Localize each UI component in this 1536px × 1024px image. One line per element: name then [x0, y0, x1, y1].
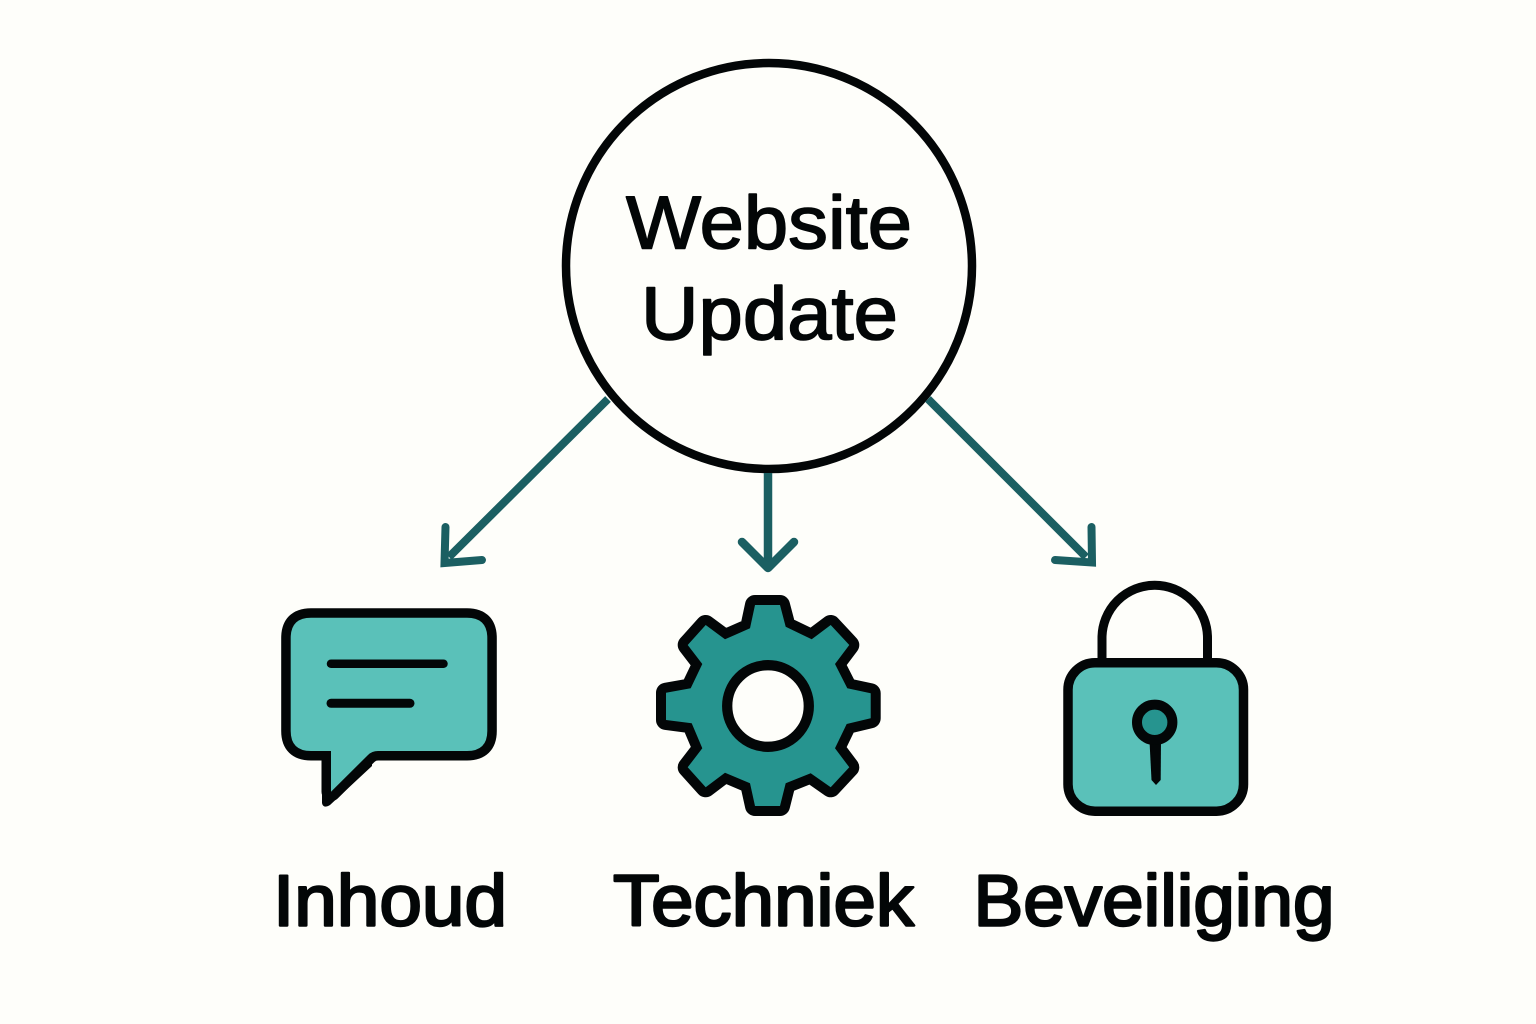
arrow: to Techniek	[742, 473, 794, 568]
label: Beveiliging: Beveiliging	[974, 862, 1334, 942]
central circle: Website Update: Website	[626, 180, 912, 264]
central circle: Website Update: Update	[641, 272, 898, 356]
central circle: Website Update	[566, 63, 972, 469]
label: Techniek: Techniek	[613, 862, 915, 942]
icon: padlock	[1068, 585, 1244, 811]
label: Inhoud: Inhoud	[273, 862, 507, 942]
arrow: to Inhoud	[444, 399, 608, 563]
arrow: to Beveiliging	[928, 399, 1092, 562]
icon: speech bubble	[291, 618, 487, 807]
icon: gear	[666, 605, 871, 806]
